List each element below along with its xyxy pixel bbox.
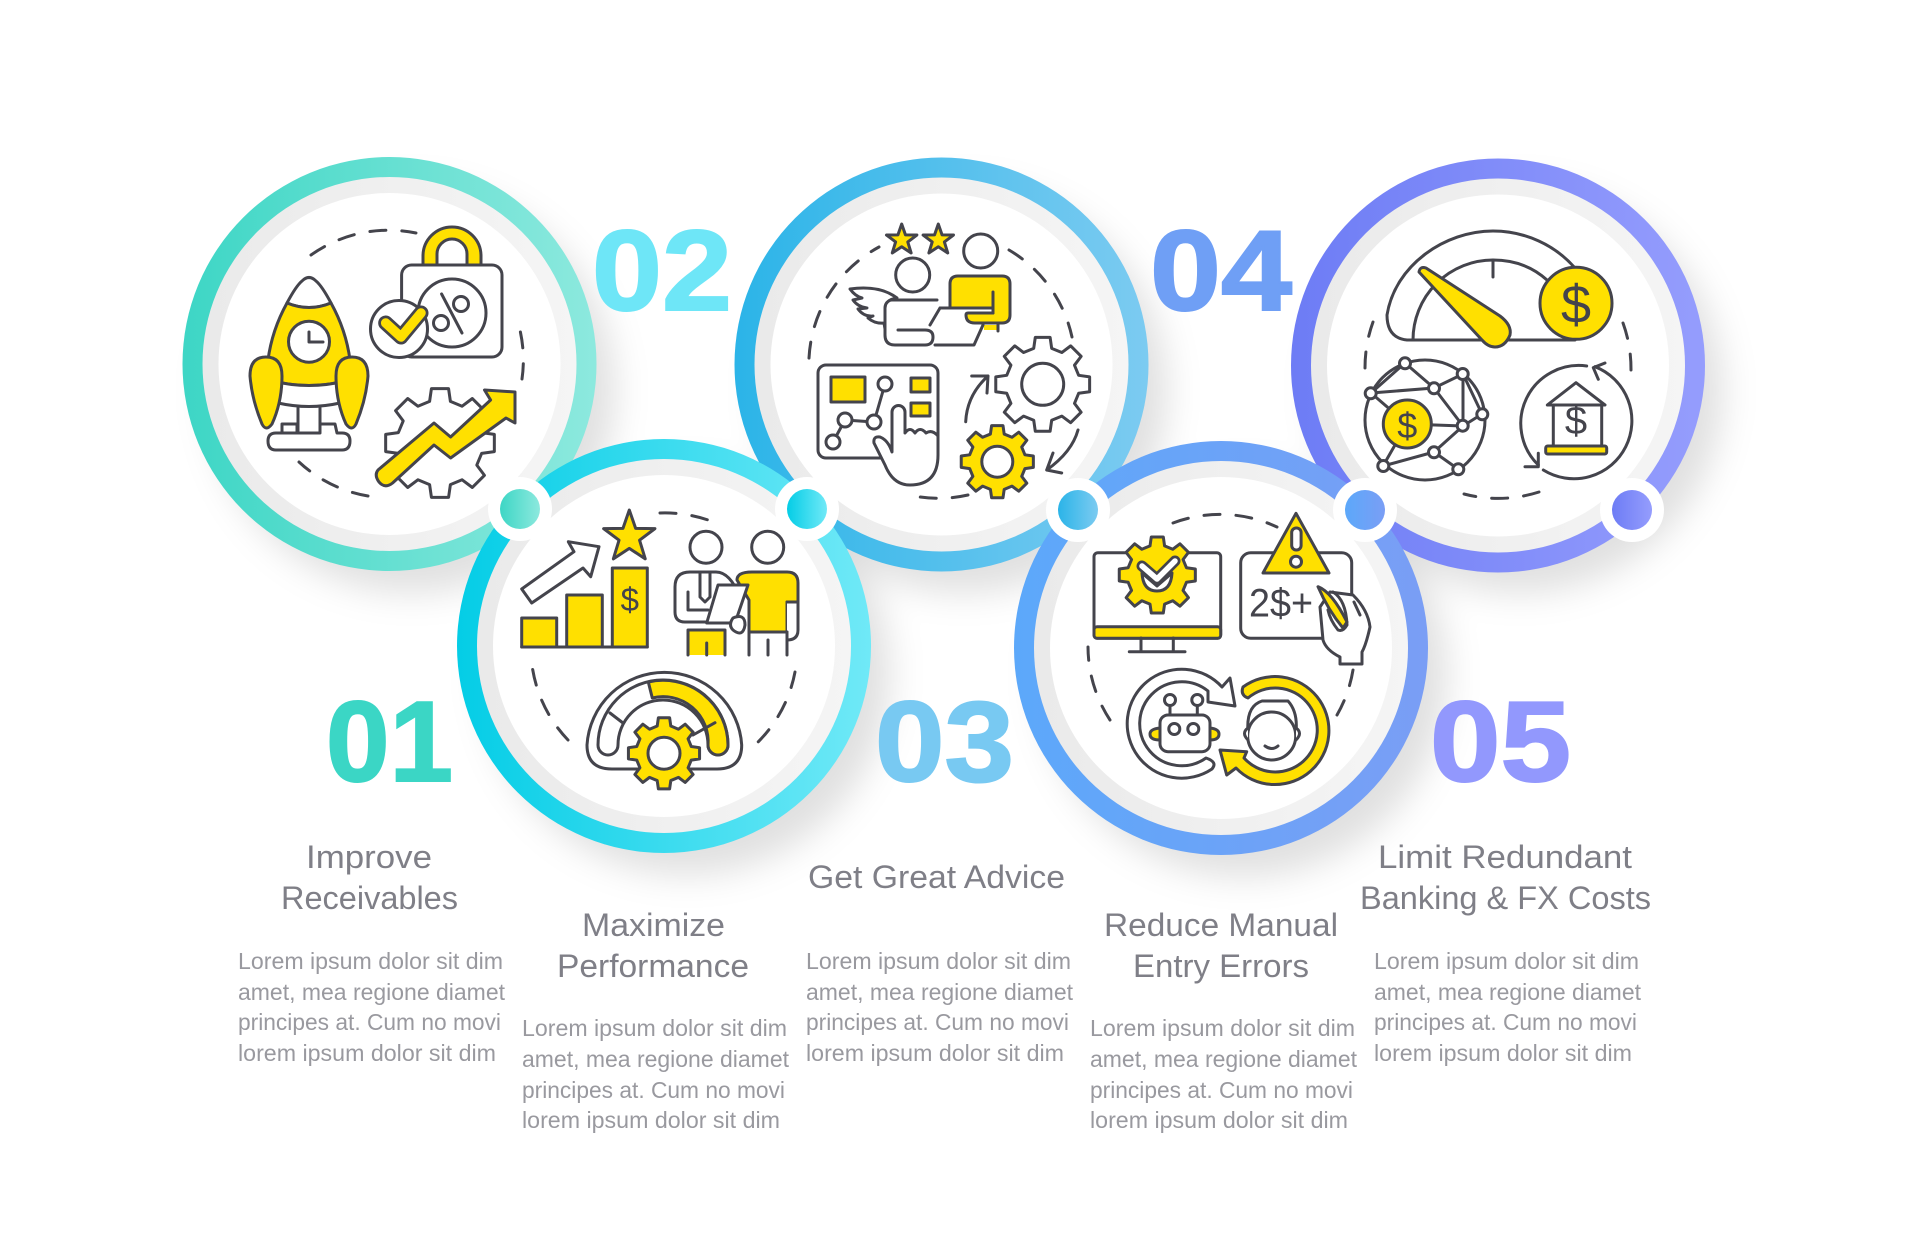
heading: limit redundant banking and fx costs: Banking & FX Costs [1360,880,1651,916]
panel: circle 02 maximize performance [457,439,871,853]
icon: gears with cycle arrows [961,337,1090,498]
icon: padlock with percent and check [370,227,502,358]
body text: principes at. Cum no movi [522,1077,785,1103]
icon: bank with cycle arrows: $ [1565,399,1587,443]
icon: gear with rising arrow [376,389,515,497]
icon: network globe with dollar: $ [1397,405,1417,446]
text block: step 5 [1360,839,1651,1066]
body text [1374,948,1642,1066]
body text: Lorem ipsum dolor sit dim [806,948,1071,974]
heading: improve receivables: Receivables [281,880,458,916]
icon: bar chart with arrow and star [522,510,655,647]
body text: lorem ipsum dolor sit dim [238,1040,496,1066]
heading: reduce manual entry errors [1104,907,1338,984]
panel: circle 03 get great advice [734,158,1148,572]
text block: step 1 [238,839,506,1066]
icon: error warning and writing hand: 2$+ [1249,582,1313,626]
icon: speedometer with dollar coin: $ [1561,275,1591,335]
number 01: 01 [326,679,453,806]
icon: two people with clipboard [675,531,798,655]
drop shadows [209,187,1723,877]
heading: maximize performance: Performance [557,948,749,984]
heading: reduce manual entry errors: Reduce Manual [1104,907,1338,943]
body text: amet, mea regione diamet [806,979,1074,1005]
body text: Lorem ipsum dolor sit dim [522,1015,787,1041]
icon: robot and human cycle [1127,669,1329,785]
icon: monitor with gear and check [1094,537,1221,652]
connector dot 2 [775,477,839,541]
heading: limit redundant banking and fx costs [1360,839,1651,916]
icon: bar chart with arrow and star: $ [621,581,639,618]
panel: circle 04 reduce manual entry errors [1014,441,1428,855]
body text: amet, mea regione diamet [238,979,506,1005]
body text: amet, mea regione diamet [1374,979,1642,1005]
heading: get great advice: Get Great Advice [808,859,1065,895]
heading: improve receivables: Improve [306,839,432,875]
connector dot 5 [1600,478,1664,542]
number 04: 04 [1150,208,1292,335]
body text: principes at. Cum no movi [806,1009,1069,1035]
icon: error warning and writing hand [1241,513,1370,664]
body text [806,948,1074,1066]
heading: maximize performance: Maximize [582,907,725,943]
icon: speedometer with dollar coin [1387,231,1612,347]
icon: rocket [250,278,368,450]
text block: step 4 [1090,907,1358,1133]
body text [522,1015,790,1133]
heading: limit redundant banking and fx costs: Limit Redundant [1378,839,1632,875]
icon: bank with cycle arrows [1521,363,1632,479]
heading: improve receivables [281,839,458,916]
text block: step 3 [806,859,1074,1066]
icon: angel investor and adviser at laptop [850,234,1010,345]
connector dot 4 [1333,478,1397,542]
heading: maximize performance [557,907,749,984]
body text: amet, mea regione diamet [1090,1046,1358,1072]
body text: lorem ipsum dolor sit dim [522,1107,780,1133]
panel: circle 01 improve receivables [182,157,596,571]
number 05: 05 [1430,679,1571,806]
body text: principes at. Cum no movi [1374,1009,1637,1035]
body text: lorem ipsum dolor sit dim [1374,1040,1632,1066]
number 02: 02 [592,208,732,335]
body text: Lorem ipsum dolor sit dim [1090,1015,1355,1041]
body text: amet, mea regione diamet [522,1046,790,1072]
number 03: 03 [875,679,1014,806]
text block: step 2 [522,907,790,1133]
connector dot 1 [488,477,552,541]
body text: Lorem ipsum dolor sit dim [1374,948,1639,974]
body text: lorem ipsum dolor sit dim [806,1040,1064,1066]
body text: principes at. Cum no movi [1090,1077,1353,1103]
body text: Lorem ipsum dolor sit dim [238,948,503,974]
connector dot 3 [1046,478,1110,542]
heading: reduce manual entry errors: Entry Errors [1133,948,1309,984]
icon: performance gauge with gear [587,672,742,789]
body text: principes at. Cum no movi [238,1009,501,1035]
icon: network globe with dollar [1365,358,1488,480]
body text [1090,1015,1358,1133]
icon: two stars [886,224,954,253]
icon: dashboard with pointing hand [818,365,938,485]
body text [238,948,506,1066]
panel: circle 05 limit redundant banking [1291,158,1705,572]
body text: lorem ipsum dolor sit dim [1090,1107,1348,1133]
